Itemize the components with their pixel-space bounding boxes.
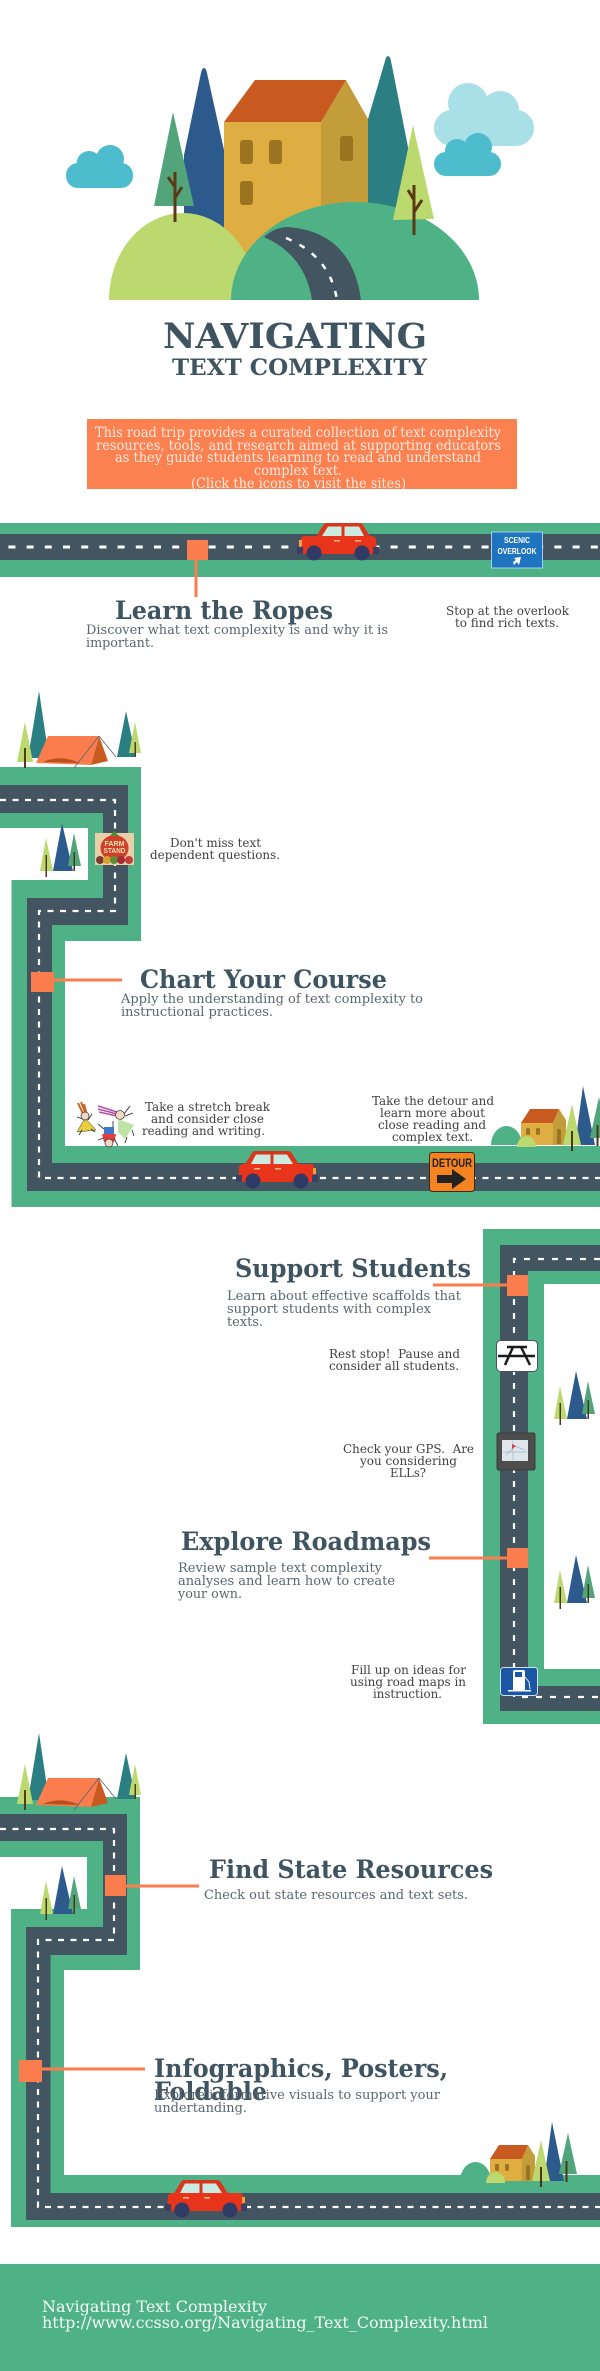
note: farm stand: dependent questions. — [150, 847, 280, 862]
icon: light green tree — [393, 125, 434, 220]
marker: find state resources — [105, 1875, 199, 1896]
text: support students description: support students with complex — [227, 1302, 432, 1317]
icon: gas sign — [500, 1668, 538, 1696]
heading: learn the ropes: Learn the Ropes — [115, 596, 333, 625]
footer: Navigating Text Complexity — [42, 2297, 267, 2316]
marker: support students — [433, 1275, 528, 1296]
icon: scenic overlook sign: SCENIC — [504, 535, 530, 545]
note: gps: Check your GPS. Are — [343, 1441, 474, 1456]
note: farm stand — [150, 835, 280, 862]
note: gas — [350, 1662, 466, 1701]
note: scenic overlook: to find rich texts. — [455, 615, 559, 630]
icon: trees 3 — [554, 1555, 595, 1609]
marker: learn the ropes — [187, 540, 208, 597]
note: detour: close reading and — [378, 1117, 486, 1132]
heading: infographics, posters, foldable — [154, 2054, 448, 2106]
icon: green hill — [231, 202, 479, 300]
icon: farm stand sign: FARM — [104, 841, 125, 848]
heading: chart your course: Chart Your Course — [140, 965, 387, 994]
hero illustration — [66, 56, 534, 300]
heading: support students: Support Students — [235, 1254, 471, 1283]
text: explore roadmaps description: analyses and learn how to create — [178, 1574, 395, 1589]
note: gas: Fill up on ideas for — [351, 1662, 466, 1677]
note: detour: complex text. — [392, 1129, 473, 1144]
title: TEXT COMPLEXITY — [172, 355, 427, 381]
text: support students description — [227, 1289, 462, 1330]
icon: village 1 — [491, 1086, 600, 1151]
intro callout: (Click the icons to visit the sites) — [191, 476, 406, 492]
icon: stretching kids — [77, 1102, 134, 1147]
icon: light green hill — [109, 213, 257, 300]
note: detour: Take the detour and — [372, 1093, 494, 1108]
icon: red car 3 — [165, 2180, 247, 2218]
text: infographics description — [154, 2088, 441, 2116]
text: learn the ropes description — [86, 623, 388, 651]
intro callout: complex text. — [254, 463, 342, 479]
icon: green tree — [154, 112, 194, 206]
icon: scenic overlook sign — [492, 532, 542, 568]
text: learn the ropes description: important. — [86, 636, 154, 651]
text: support students description: Learn about effective scaffolds that — [227, 1289, 462, 1304]
note: gps: you considering — [359, 1453, 457, 1468]
icon: road on hill — [264, 227, 361, 300]
icon: gps device — [497, 1433, 535, 1470]
text: infographics description: Explore informative visuals to support your — [154, 2088, 441, 2103]
note: stretch break: reading and writing. — [142, 1123, 265, 1138]
road section 2 — [0, 767, 600, 1207]
intro callout — [87, 419, 517, 492]
heading: find state resources: Find State Resources — [209, 1855, 493, 1884]
title — [163, 316, 427, 381]
note: detour: learn more about — [380, 1105, 485, 1120]
icon: campsite 1 — [17, 691, 141, 768]
note: gps: ELLs? — [390, 1465, 426, 1480]
icon: left cloud — [66, 145, 133, 188]
icon: farm stand sign: STAND — [104, 848, 126, 855]
intro callout: as they guide students learning to read and understand — [115, 450, 481, 466]
note: rest stop — [329, 1346, 460, 1373]
note: rest stop: consider all students. — [329, 1358, 459, 1373]
marker: explore roadmaps — [429, 1548, 528, 1568]
icon: tree trunk right — [408, 185, 422, 235]
text: learn the ropes description: Discover what text complexity is and why it is — [86, 623, 388, 638]
text: chart your course description: instructional practices. — [121, 1005, 273, 1020]
note: stretch break: and consider close — [151, 1111, 264, 1126]
icon: detour sign — [430, 1152, 474, 1192]
icon: village 2 — [460, 2122, 577, 2187]
note: gas: using road maps in — [350, 1674, 466, 1689]
icon: small right cloud — [434, 133, 501, 176]
note: scenic overlook — [446, 603, 569, 630]
icon: tree trunk — [168, 172, 182, 222]
road section 3 — [483, 1229, 600, 1724]
title: NAVIGATING — [163, 316, 427, 357]
icon: teal tree — [360, 56, 408, 240]
heading: infographics, posters, foldable: Infographics, Posters, — [154, 2054, 448, 2083]
icon: house — [224, 80, 368, 262]
icon: farm stand sign — [95, 831, 134, 865]
icon: red car 1 — [297, 523, 379, 560]
intro callout: This road trip provides a curated collection of text complexity — [95, 425, 501, 441]
footer: http://www.ccsso.org/Navigating_Text_Complexity.html — [42, 2313, 488, 2332]
note: gas: instruction. — [373, 1686, 442, 1701]
note: farm stand: Don't miss text — [170, 835, 261, 850]
text: support students description: texts. — [227, 1315, 263, 1330]
text: explore roadmaps description: your own. — [177, 1587, 242, 1602]
marker: infographics — [19, 2060, 145, 2082]
text: find state resources description: Check out state resources and text sets. — [204, 1888, 468, 1903]
heading: infographics, posters, foldable: Foldable — [154, 2077, 267, 2106]
text: explore roadmaps description — [177, 1561, 395, 1602]
road section 4 — [0, 1797, 600, 2227]
marker: chart your course — [31, 972, 122, 992]
icon: scenic overlook sign: OVERLOOK — [498, 546, 537, 556]
text: chart your course description: Apply the understanding of text complexity to — [120, 992, 423, 1007]
icon: trees 4 — [40, 1866, 81, 1920]
icon: blue tree — [184, 68, 224, 240]
road centre line — [286, 238, 337, 300]
note: detour — [372, 1093, 494, 1144]
text: infographics description: undertanding. — [154, 2101, 247, 2116]
text: explore roadmaps description: Review sample text complexity — [178, 1561, 383, 1576]
intro callout: resources, tools, and research aimed at supporting educators — [96, 438, 501, 454]
note: scenic overlook: Stop at the overlook — [446, 603, 569, 618]
note: gps — [343, 1441, 474, 1480]
note: stretch break: Take a stretch break — [145, 1099, 270, 1114]
icon: trees 1 — [40, 823, 81, 877]
road section 1 — [0, 523, 600, 577]
note: rest stop: Rest stop! Pause and — [329, 1346, 460, 1361]
icon: rest stop sign — [496, 1340, 538, 1372]
icon: detour sign: DETOUR — [432, 1156, 472, 1170]
icon: large pale cloud — [434, 83, 534, 146]
icon: trees 2 — [554, 1371, 595, 1425]
icon: campsite 2 — [17, 1733, 141, 1810]
note: stretch break — [142, 1099, 270, 1138]
text: chart your course description — [120, 992, 423, 1020]
heading: explore roadmaps: Explore Roadmaps — [181, 1527, 431, 1556]
icon: red car 2 — [236, 1151, 318, 1188]
footer — [0, 2264, 600, 2371]
